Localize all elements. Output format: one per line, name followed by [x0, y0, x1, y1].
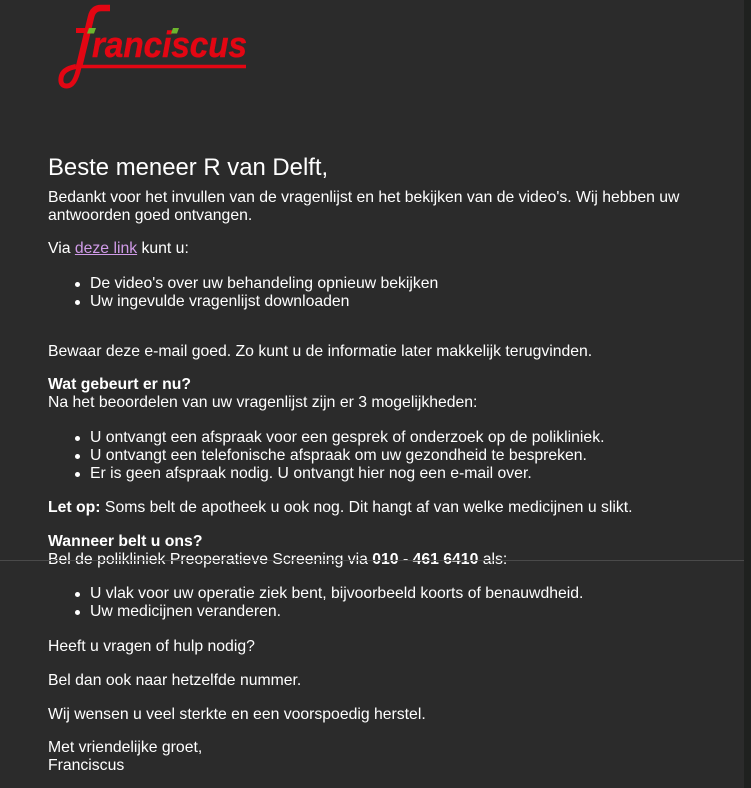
possibilities list: U ontvangt een afspraak voor een gesprek of onderzoek op de polikliniek. [90, 429, 604, 446]
section: when to call: Wanneer belt u ons? [48, 533, 202, 550]
greeting heading: Beste meneer R van Delft, [48, 154, 328, 181]
section: what happens next [48, 376, 477, 411]
possibilities list: Er is geen afspraak nodig. U ontvangt hier nog een e-mail over. [90, 465, 532, 482]
pharmacy notice: Let op: Soms belt de apotheek u ook nog. Dit hangt af van welke medicijnen u slikt. [48, 499, 633, 516]
wishes line: Wij wensen u veel sterkte en een voorspoedig herstel. [48, 706, 426, 723]
intro paragraph [48, 189, 680, 224]
phone line: Bel dan ook naar hetzelfde nummer. [48, 672, 301, 689]
sign-off: Met vriendelijke groet, [48, 739, 202, 756]
section: what happens next: Wat gebeurt er nu? [48, 376, 191, 393]
intro paragraph: antwoorden goed ontvangen. [48, 207, 252, 224]
link sentence: Via deze link kunt u: [48, 240, 189, 257]
keep e-mail note: Bewaar deze e-mail goed. Zo kunt u de informatie later makkelijk terugvinden. [48, 343, 592, 360]
call reasons list: Uw medicijnen veranderen. [90, 603, 281, 620]
logo: Franciscus [58, 4, 247, 88]
call reasons list: U vlak voor uw operatie ziek bent, bijvoorbeeld koorts of benauwdheid. [90, 585, 583, 602]
call reasons list [75, 585, 583, 620]
questions line: Heeft u vragen of hulp nodig? [48, 638, 255, 655]
section: what happens next: Na het beoordelen van uw vragenlijst zijn er 3 mogelijkheden: [48, 394, 477, 411]
link options list [75, 275, 438, 310]
possibilities list: U ontvangt een telefonische afspraak om uw gezondheid te bespreken. [90, 447, 587, 464]
intro paragraph: Bedankt voor het invullen van de vragenlijst en het bekijken van de video's. Wij hebben uw [48, 189, 679, 206]
logo: Franciscus: ranciscus [92, 24, 247, 65]
possibilities list [75, 429, 604, 482]
sign-off [48, 739, 202, 774]
link options list: De video's over uw behandeling opnieuw bekijken [90, 275, 438, 292]
link options list: Uw ingevulde vragenlijst downloaden [90, 293, 349, 310]
right edge strip [744, 0, 751, 788]
section: when to call [48, 533, 507, 568]
sign-off: Franciscus [48, 757, 124, 774]
section: when to call: Bel de polikliniek Preoperatieve Screening via 010 - 461 6410 als: [48, 551, 507, 568]
